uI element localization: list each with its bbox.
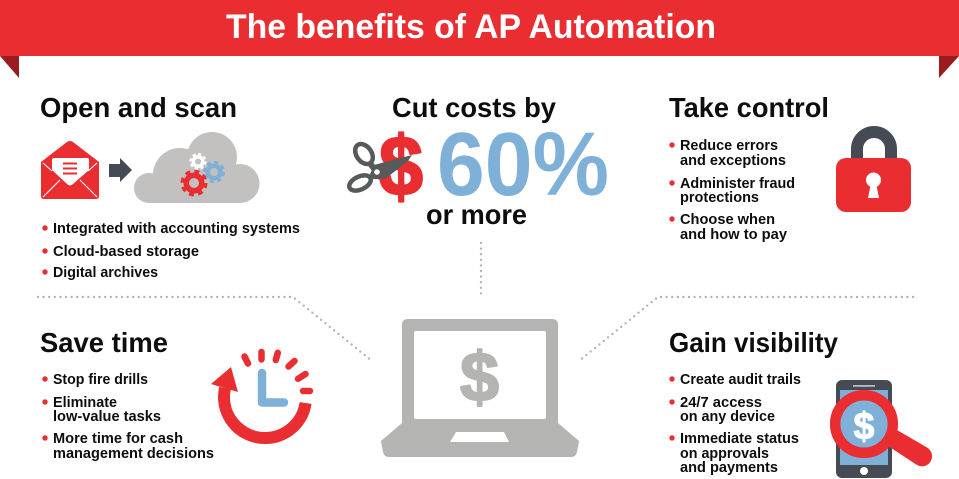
bullet list: gain visibility: on any device (680, 409, 775, 425)
panel: take control (669, 92, 911, 243)
bullet list: gain visibility (669, 372, 801, 476)
bullet list: open and scan: Integrated with accounting systems (53, 221, 300, 237)
bullet list: take control: and how to pay (680, 227, 787, 243)
icon: arrow (109, 158, 132, 182)
title: The benefits of AP Automation (226, 8, 716, 46)
big number: 60% (437, 115, 609, 215)
bullet list: take control: Choose when (680, 212, 775, 228)
panel: gain visibility (669, 327, 932, 478)
bullet list: save time: Eliminate (53, 395, 117, 411)
panel: open and scan (40, 92, 300, 281)
icon: padlock (836, 132, 911, 212)
bullet list: take control (669, 138, 795, 243)
bullet list: gain visibility: 24/7 access (680, 395, 762, 411)
heading: take control: Take control (669, 92, 829, 123)
panel: cut costs (347, 92, 609, 230)
bullet list: open and scan: Digital archives (53, 265, 158, 281)
dotted connector lines (38, 243, 913, 361)
icon: clock with arrow (211, 352, 310, 438)
bullet list: open and scan (42, 221, 300, 281)
bullet list: take control: Reduce errors (680, 138, 778, 154)
bullet list: take control: and exceptions (680, 153, 786, 169)
bullet list: save time (42, 372, 214, 462)
icon: laptop with dollar sign (381, 319, 579, 457)
heading: open and scan: Open and scan (40, 92, 237, 123)
bullet list: save time: Stop fire drills (53, 372, 148, 388)
icon: laptop with dollar sign: $ (460, 338, 499, 416)
bullet list: take control: protections (680, 190, 759, 206)
icon: cloud with gears (134, 132, 260, 203)
text: or more: or more (426, 199, 527, 230)
bullet list: save time: management decisions (53, 446, 214, 462)
panel: save time (40, 327, 310, 462)
icon: scissors cutting dollar sign (347, 119, 423, 213)
heading: save time: Save time (40, 327, 168, 358)
bullet list: open and scan: Cloud-based storage (53, 244, 199, 260)
icon: phone with magnifier (835, 380, 932, 478)
bullet list: save time: More time for cash (53, 431, 183, 447)
bullet list: gain visibility: and payments (680, 460, 778, 476)
bullet list: save time: low-value tasks (53, 409, 161, 425)
heading: cut costs by: Cut costs by (392, 92, 556, 123)
bullet list: gain visibility: Create audit trails (680, 372, 801, 388)
header ribbon (0, 0, 959, 78)
bullet list: gain visibility: Immediate status (680, 431, 799, 447)
icon: phone with magnifier: $ (854, 406, 874, 448)
bullet list: gain visibility: on approvals (680, 446, 769, 462)
bullet list: take control: Administer fraud (680, 176, 795, 192)
icon: envelope (41, 141, 99, 199)
icon: scissors cutting dollar sign: $ (379, 119, 423, 213)
heading: gain visibility: Gain visibility (669, 327, 838, 358)
